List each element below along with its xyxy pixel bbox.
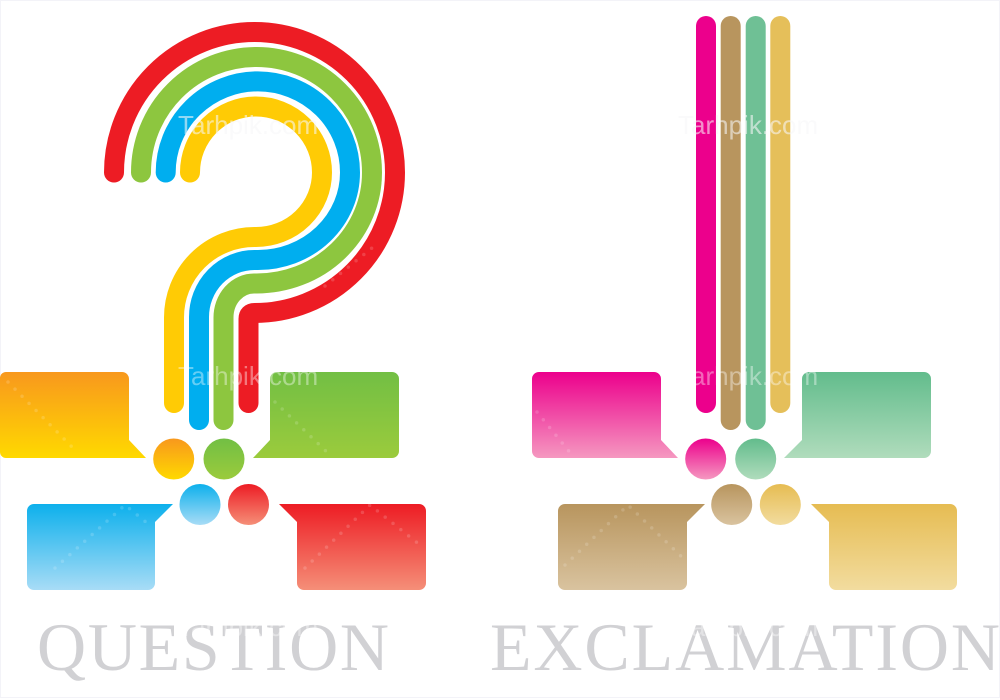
- watermarks: Tarhpik.com: [678, 110, 818, 140]
- callout: pink speech bubble: [532, 372, 678, 458]
- node: orange circle: [153, 438, 194, 480]
- icon: exclamation stripes: [706, 26, 780, 420]
- callout: gold speech bubble: [811, 504, 957, 590]
- node: pink circle: [685, 438, 726, 480]
- green question mark stripe: [141, 57, 372, 420]
- heading: EXCLAMATION: EXCLAMATION: [490, 609, 1000, 685]
- callout: sea green speech bubble: [784, 372, 931, 458]
- watermarks: Tarhpik.com: [678, 612, 818, 642]
- node: blue circle: [180, 484, 220, 525]
- node: green circle: [204, 438, 244, 480]
- watermarks: Tarhpik.com: [678, 361, 818, 391]
- callout: green speech bubble: [253, 372, 399, 458]
- callout: blue speech bubble: [27, 504, 173, 590]
- blue question mark stripe: [166, 81, 350, 420]
- red question mark stripe: [114, 32, 395, 403]
- watermarks: Tarhpik.com: [178, 110, 318, 140]
- panel: question mark infographic: [0, 32, 426, 590]
- icon: rainbow question mark: [114, 32, 395, 420]
- magenta stripe: [696, 26, 716, 403]
- watermarks: Tarhpik.com: [178, 361, 318, 391]
- gold stripe: [770, 26, 790, 403]
- sea green stripe: [746, 26, 766, 420]
- node: red circle: [228, 484, 269, 525]
- callout: red speech bubble: [279, 504, 426, 590]
- callout: orange speech bubble: [0, 372, 146, 458]
- panel: exclamation infographic: [532, 26, 957, 590]
- node: tan circle: [711, 484, 752, 525]
- watermarks: [178, 110, 818, 642]
- watermarks: Tarhpik.com: [178, 612, 318, 642]
- yellow question mark stripe: [174, 107, 322, 403]
- callout: tan speech bubble: [558, 504, 705, 590]
- tan stripe: [721, 26, 741, 420]
- heading: QUESTION: QUESTION: [37, 609, 389, 685]
- node: gold circle: [760, 484, 801, 525]
- node: sea green circle: [735, 438, 776, 480]
- watermarks: Tarhpik.com: [678, 110, 818, 140]
- watermarks: Tarhpik.com: [178, 110, 318, 140]
